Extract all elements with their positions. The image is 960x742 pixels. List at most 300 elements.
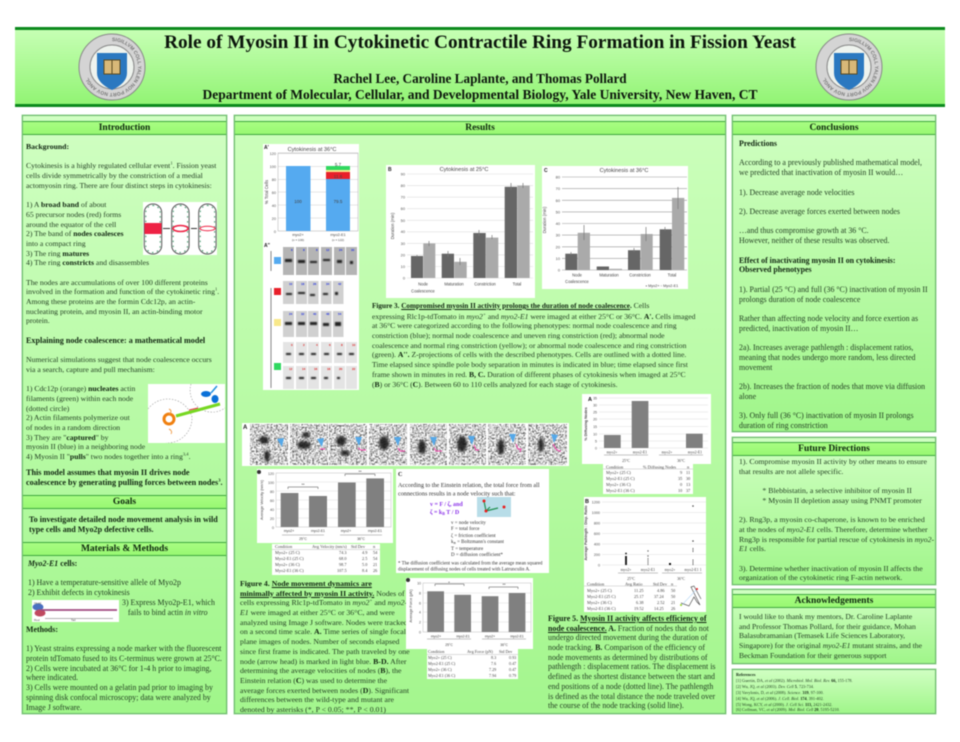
chart: A prime cytokinesis at 36C: 60 — [272, 191, 276, 195]
panel: C einstein relation: D = diffusion coefficient* — [451, 553, 503, 558]
chart: fig 5 B pathlength displacement: myo2+ — [621, 568, 631, 572]
text: myo2-E1 cells — [28, 559, 182, 598]
table: force: 7.6 — [491, 661, 496, 666]
text: future directions body: Rng3p is responsible for partial rescue of cytokinesis in myo2- — [739, 534, 934, 544]
text: introduction body: around the equator of the cell — [26, 220, 116, 228]
figure: A double prime micrographs: 10 — [352, 343, 356, 347]
table: diffusing nodes: 11 — [686, 470, 690, 475]
chart: B cytokinesis at 25C: 0 — [403, 276, 406, 280]
chart: B average velocity: myo2-E1 — [368, 529, 382, 533]
chart: B average velocity: 60 — [270, 499, 274, 503]
chart: B cytokinesis at 25C: Node — [418, 282, 429, 286]
panel: C einstein relation: * The diffusion coefficient was calculated from the average mean squared — [398, 562, 543, 566]
heading: goals: Goals — [113, 497, 136, 507]
text: conclusions body: 2). Decrease average forces exerted between nodes — [739, 207, 900, 216]
figure: A double prime micrographs: 6 — [291, 248, 293, 252]
figure: A double prime micrographs: 8 — [316, 248, 318, 252]
table: pathlength ratio: 6.38 — [636, 600, 644, 605]
panel: C einstein relation: displacement of diffusing nodes of cells treated with Latrunculin A. — [398, 568, 530, 572]
table: velocity: n — [373, 544, 376, 549]
table: pathlength ratio: Condition — [587, 582, 605, 586]
panel: C einstein relation: ζ = friction coefficient — [451, 533, 496, 539]
table: pathlength ratio: Myo2+ (36 C) — [587, 600, 612, 605]
chart: B average velocity: 40 — [270, 508, 274, 512]
chart: B cytokinesis at 25C: 70 — [401, 195, 406, 200]
text: introduction body: 1) A broad band of about — [26, 200, 106, 209]
table: pathlength ratio: 26 — [671, 606, 676, 611]
caption: figure 5: Figure 5. Myosin II activity affects efficiency of — [548, 614, 707, 623]
chart: D average force: 6 — [419, 602, 421, 606]
text: model assumption: coalescence by generating pulling forces between nodes3. — [26, 477, 223, 487]
chart: fig 5 B pathlength displacement: 400 — [594, 542, 600, 546]
text: conclusions body: Observed phenotypes — [739, 265, 812, 274]
chart: A prime cytokinesis at 36C: A' — [264, 145, 269, 151]
panel: results — [234, 115, 726, 714]
left column — [22, 115, 227, 714]
figure: myosin molecule: Tail — [71, 618, 76, 622]
caption: figure 5 — [547, 614, 716, 711]
text: myo2-E1 cells: 2) Exhibit defects in cytokinesis — [28, 588, 130, 597]
figure: A time series strip: A — [243, 425, 248, 431]
text: introduction body: cells divide symmetrically by the constriction of a medial — [26, 171, 203, 180]
figure: A double prime micrographs: 8 — [303, 248, 305, 252]
text: introduction body: Explaining node coalescence: a mathematical model — [26, 336, 205, 345]
chart: fig 5 B pathlength displacement: 36°C — [677, 577, 685, 581]
table: force: 0.79 — [509, 673, 516, 678]
authors: Rachel Lee, Caroline Laplante, and Thomas Pollard — [333, 71, 627, 86]
chart: B cytokinesis at 25C: Cytokinesis at 25°C — [440, 167, 488, 173]
caption: figure 5: is defined as the total distance the node traveled over — [548, 692, 715, 700]
chart: D average force: Average Force (pN) — [409, 589, 413, 623]
chart: D average force: myo2+ — [485, 634, 495, 638]
text: conclusions body: …and thus compromise growth at 36 °C. — [739, 226, 869, 235]
text: introduction body: 3) They are "captured" by — [26, 433, 108, 442]
chart: A prime cytokinesis at 36C: 120 — [270, 152, 276, 156]
figures — [242, 144, 712, 680]
chart: B average velocity — [257, 469, 393, 543]
text: introduction body: 4) The ring constricts and disassembles — [26, 258, 149, 267]
heading: future directions — [733, 442, 935, 456]
table: diffusing nodes: Myo2+ (36 C) — [606, 482, 631, 487]
chart: C cytokinesis at 36C: 10 — [556, 256, 561, 261]
chart: A prime cytokinesis at 36C: 100 — [294, 199, 302, 204]
chart: D average force: myo2-E1 — [510, 634, 524, 638]
figure: A double prime micrographs: 16 — [314, 367, 318, 371]
chart: D average force: 0 — [419, 630, 421, 634]
text: introduction body: The nodes are accumulations of over 100 different proteins — [26, 278, 208, 287]
figure: A double prime micrographs: 12 — [289, 367, 293, 371]
text: future directions body: 1). Compromise myosin II activity by other means to ensure — [739, 457, 927, 466]
table: pathlength ratio: Myo2-E1 (36 C) — [587, 606, 616, 611]
panel: C einstein relation: k — [451, 540, 454, 545]
figure: A double prime micrographs: 0 — [291, 343, 293, 347]
table: pathlength ratio: n — [671, 582, 674, 586]
text: conclusions body: we predicted that inactivation of myosin II would… — [739, 168, 903, 177]
caption: figure 3 — [372, 301, 696, 390]
heading: results — [235, 121, 725, 135]
table: velocity: Myo2+ (25 C) — [275, 550, 300, 555]
chart: B cytokinesis at 25C: 20 — [401, 252, 406, 257]
chart: B cytokinesis at 25C: Duration (min) — [390, 212, 395, 239]
panel: references — [732, 669, 936, 714]
text: methods: 1) Yeast strains expressing a node marker with the fluorescent — [26, 644, 221, 653]
caption: figure 4: denoted by asterisks (*, P < 0.05; **, P < 0.01) — [240, 705, 386, 714]
chart: C cytokinesis at 36C: 40 — [556, 221, 561, 226]
table: velocity: 68.0 — [339, 556, 347, 561]
text: conclusions body — [738, 139, 928, 431]
text: references: [5] Wong, KCY, et al (2000). J. Cell Sci. 113, 2421-2432. — [736, 702, 832, 707]
text: introduction body: into a compact ring — [26, 239, 86, 248]
table: velocity: 54 — [373, 550, 378, 555]
caption: figure 4: on a second time scale. A. Time series of single focal — [240, 627, 406, 636]
figure: A double prime micrographs: 26 — [313, 282, 317, 286]
panel: materials and methods — [22, 541, 226, 713]
table: velocity: Std Dev — [351, 544, 366, 549]
chart: B average velocity: 100 — [268, 481, 274, 485]
caption: figure 5: end positions of a node (dotted line). The pathlength — [548, 682, 713, 691]
text: references: References — [736, 672, 755, 677]
chart: B average velocity: myo2+ — [284, 529, 294, 533]
chart: B average velocity: myo2+ — [341, 529, 351, 533]
chart: A prime cytokinesis at 36C: 40 — [272, 204, 276, 208]
text: introduction body: (dotted circle) — [26, 404, 69, 413]
figure: A double prime micrographs: 20 — [339, 367, 343, 371]
chart: B cytokinesis at 25C — [386, 165, 535, 298]
text: methods — [26, 625, 222, 713]
table: diffusing nodes: 35 — [678, 476, 682, 481]
table: force: Avg Force (pN) — [467, 649, 493, 654]
text: future directions body: at the nodes of myo2-E1 cells. Therefore, determine whether — [739, 525, 928, 534]
chart: A prime cytokinesis at 36C: % Total Cells — [264, 180, 269, 204]
table: velocity: 74.3 — [339, 550, 347, 555]
figure: A double prime micrographs: 40 — [313, 312, 317, 316]
table: pathlength ratio: 50 — [671, 588, 675, 593]
chart: fig 5 A diffusing nodes: myo2-E1 — [633, 450, 647, 454]
caption: figure 4: plane images of nodes. Number of seconds elapsed — [240, 637, 399, 646]
table: velocity: 107.5 — [337, 568, 347, 573]
text: methods: spinning disk confocal microscopy; data were analyzed by — [26, 693, 211, 702]
text: future directions body: E1 cells. — [739, 544, 766, 553]
panel: C einstein relation: ζ = k — [430, 510, 442, 516]
table: force — [427, 649, 518, 679]
chart: C cytokinesis at 36C: Node — [572, 272, 583, 278]
text: methods: Methods: — [26, 625, 58, 634]
text: future directions body: * Blebbistatin, a selective inhibitor of myosin II — [762, 486, 912, 495]
chart: B cytokinesis at 25C: 90 — [401, 172, 406, 176]
text: introduction body: myosin II (blue) in a neighboring node — [26, 442, 145, 451]
figure: A time series strip — [242, 423, 569, 466]
chart: C cytokinesis at 36C: Duration (min) — [542, 206, 547, 233]
text: future directions body — [738, 457, 934, 582]
text: methods: where indicated. — [26, 673, 78, 682]
chart: fig 5 A diffusing nodes: 0 — [595, 446, 597, 450]
chart: A prime cytokinesis at 36C: 20 — [272, 217, 276, 221]
chart: fig 5 A diffusing nodes: 30 — [593, 404, 597, 408]
figure: myosin molecule: Rod — [34, 618, 40, 622]
text: acknowledgements body: and Professor Thomas Pollard, for their guidance, Mohan — [739, 622, 916, 631]
chart: A prime cytokinesis at 36C: 5.7 — [335, 162, 342, 167]
chart: C cytokinesis at 36C: 30 — [556, 233, 561, 238]
chart: C cytokinesis at 36C: 0 — [558, 268, 561, 272]
chart: C cytokinesis at 36C: 60 — [556, 198, 561, 203]
text: conclusions body: Effect of inactivating myosin II on cytokinesis: — [739, 256, 896, 265]
chart: fig 5 A diffusing nodes: 35 — [593, 396, 597, 400]
table: pathlength ratio: 37.24 — [654, 594, 665, 599]
text: acknowledgements body: I would like to thank my mentors, Dr. Caroline Laplante — [739, 612, 912, 621]
text: myo2-E1 third point: 3) Express Myo2p-E1, which — [122, 598, 215, 607]
caption: figure 5: node tracking. B. Comparison of the efficiency of — [548, 643, 705, 652]
caption: figure 5: defined as the shortest distance between the start and — [548, 672, 715, 681]
text: introduction body: Cytokinesis is a highly regulated cellular event1. Fission yeast — [26, 161, 216, 170]
chart: D average force: 25°C — [445, 643, 453, 647]
text: acknowledgements body: Balasubramanian (Temasek Life Sciences Laboratory, — [739, 631, 905, 640]
chart: D average force: 36°C — [500, 643, 508, 647]
table: pathlength ratio: 11.25 — [634, 588, 644, 593]
caption: figure 5: undergo directed movement during the duration of — [548, 633, 707, 642]
figure: A double prime micrographs: 18 — [327, 367, 331, 371]
chart: fig 5 B pathlength displacement: 600 — [594, 532, 600, 536]
caption: figure 4: average forces exerted between nodes (D). Significant — [240, 686, 409, 695]
caption: figure 3: at 36°C were categorized according to the following phenotypes: normal node coalescence and ring — [372, 321, 677, 330]
chart: fig 5 B pathlength displacement: myo2-E1 1 — [685, 568, 702, 572]
heading: acknowledgements — [733, 594, 935, 608]
caption: figure 4: since first frame is indicated. The path traveled by one — [240, 647, 410, 656]
chart: fig 5 A diffusing nodes: 5 — [595, 440, 597, 444]
panel: goals — [22, 494, 226, 535]
text: introduction body: nucleating protein, and myosin II, an actin-binding motor — [26, 307, 203, 316]
panel: acknowledgements — [732, 589, 936, 664]
table: velocity: 98.7 — [339, 562, 347, 567]
chart: C cytokinesis at 36C: Constriction — [629, 272, 652, 278]
table: force: Myo2+ (25 C) — [428, 655, 452, 660]
table: velocity: 8.4 — [362, 568, 368, 573]
figure: A double prime micrographs: 48 — [326, 312, 330, 316]
chart: B average velocity: 0 — [272, 526, 274, 530]
text: introduction body: 4) Myosin II "pulls" two nodes together into a ring3,4. — [26, 451, 190, 461]
caption: figure 4: Figure 4. Node movement dynamics are — [240, 579, 372, 588]
panel: C einstein relation: T = temperature — [451, 547, 484, 552]
text: references — [736, 672, 853, 712]
chart: D average force: myo2-E1 — [456, 634, 470, 638]
chart: B cytokinesis at 25C: 10 — [401, 264, 406, 269]
table: diffusing nodes: Myo2-E1 (25 C) — [606, 476, 635, 481]
text: references: [6] Coffman, VC, et al (2009). Mol. Biol. Cell 20, 5195-5210. — [736, 707, 840, 712]
chart: fig 5 B pathlength displacement: myo2+ — [665, 568, 675, 572]
chart: C cytokinesis at 36C: Coalescence — [565, 279, 590, 284]
table: diffusing nodes: Condition — [606, 464, 624, 470]
panel: C einstein relation: = Boltzmann's constant — [456, 540, 504, 545]
chart: fig 5 B pathlength displacement: 200 — [594, 553, 600, 557]
table: force: 0.47 — [509, 667, 516, 672]
chart: B cytokinesis at 25C: Constriction — [474, 282, 497, 286]
panel: introduction — [22, 120, 226, 488]
chart: A prime cytokinesis at 36C: 80 — [272, 178, 276, 182]
text: conclusions body: 1). Decrease average node velocities — [739, 188, 854, 197]
table: pathlength ratio: 25.17 — [634, 594, 645, 599]
chart: fig 5 A diffusing nodes: 25°C — [622, 459, 630, 463]
heading: introduction: Introduction — [99, 123, 150, 133]
table: velocity: Avg Velocity (nm/s) — [312, 544, 347, 549]
chart: B average velocity: Average Velocity (nm/s) — [260, 479, 264, 520]
caption: figure 3: constriction (blue); normal node coalescence and uneven ring constriction (red); abnormal node — [372, 331, 665, 340]
table: diffusing nodes: 13 — [686, 482, 690, 487]
table: velocity: 54 — [373, 556, 378, 561]
panel: C einstein relation: F = total force — [451, 527, 480, 532]
text: introduction body: 2) The band of nodes coalesces — [26, 229, 123, 238]
figure: A double prime micrographs: 12 — [326, 248, 330, 252]
chart: B average velocity: ** — [301, 482, 305, 487]
chart: C cytokinesis at 36C: C — [544, 168, 548, 174]
table: diffusing nodes: Myo2+ (25 C) — [606, 470, 631, 475]
text: introduction body: involved in the formation and function of the cytokinetic ring1. — [26, 287, 219, 296]
panel: C einstein relation: T / D — [445, 510, 460, 516]
chart: B cytokinesis at 25C: 30 — [401, 241, 406, 246]
panel: C einstein relation: According to the Einstein relation, the total force from all — [398, 482, 540, 489]
figure: A double prime micrographs: 24 — [339, 248, 343, 252]
caption: figure 4: cells expressing Rlc1p-tdTomato in myo2+ and myo2- — [240, 598, 407, 607]
chart: C cytokinesis at 36C: ▪ Myo2+ ▫ Myo2-E1 — [646, 284, 678, 288]
chart: fig 5 B pathlength displacement: B — [585, 499, 589, 505]
caption: figure 5: pathlength : displacement ratios. The displacement is — [548, 662, 716, 671]
figure: A double prime micrographs: A'' — [264, 243, 270, 249]
text: methods: Image J software. — [26, 702, 82, 712]
panel: C einstein relation: v = node velocity — [451, 521, 486, 526]
chart: D average force: 2 — [419, 620, 421, 624]
panel: C einstein relation: C — [398, 472, 402, 478]
figure: A double prime micrographs: 4 — [316, 343, 318, 347]
table: velocity: 21 — [373, 562, 377, 567]
text: methods: 3) Cells were mounted on a gelatin pad prior to imaging by — [26, 683, 213, 692]
chart: fig 5 B pathlength displacement: 1000 — [592, 511, 600, 515]
table: pathlength ratio: Myo2+ (25 C) — [587, 588, 612, 593]
panel: conclusions — [732, 115, 936, 432]
text: methods: 2) Cells were incubated at 36°C for 1-4 h prior to imaging, — [26, 664, 211, 673]
text: conclusions body: duration of ring constriction — [739, 421, 828, 430]
table: pathlength ratio: 14.25 — [654, 606, 664, 611]
text: goals: type cells and Myo2p defective cells. — [29, 525, 154, 534]
chart: B cytokinesis at 25C: B — [388, 167, 392, 173]
table: diffusing nodes: 0 — [680, 482, 682, 487]
panel: future directions — [732, 437, 936, 585]
caption: figure 3: Time elapsed since spindle pole body separation in minutes is indicated in blue; time elapsed since first — [372, 360, 688, 369]
chart: C cytokinesis at 36C: Total — [668, 272, 676, 278]
caption: figure 5: node movements as determined by distributions of — [548, 653, 708, 662]
chart: C cytokinesis at 36C: 50 — [556, 209, 561, 214]
text: conclusions body: However, neither of these results was observed. — [739, 236, 889, 245]
caption: figure 4 — [239, 579, 410, 714]
chart: fig 5 A diffusing nodes: 36°C — [677, 459, 685, 463]
heading: introduction — [23, 121, 226, 135]
heading: results: Results — [465, 123, 495, 133]
text: introduction body: filaments (green) within each node — [26, 394, 133, 403]
table: velocity: Myo2-E1 (25 C) — [275, 556, 304, 561]
text: future directions body: that results are not allele specific. — [739, 467, 843, 476]
chart: A prime cytokinesis at 36C: (n = 122) — [332, 238, 344, 242]
icon: Yale seal left: SIGILLVM COLL YALEN NOV PORT NOV ANGL — [86, 37, 142, 97]
panel: C einstein relation: connections results in a node velocity such that: — [398, 492, 516, 498]
text: acknowledgements body — [738, 612, 922, 660]
figure: A double prime micrographs: 34 — [326, 282, 330, 286]
caption: figure 3: expressing Rlc1p-tdTomato in myo2+ and myo2-E1 were imaged at either 25°C or 36°C. A'. Cells imaged — [372, 311, 695, 321]
chart: B average velocity: ** — [358, 469, 362, 474]
text: references: [1] Guertin, DA, et al (2002). Microbiol. Mol. Biol. Rev. 66, 155-178. — [736, 678, 853, 683]
text: conclusions body: According to a previously published mathematical model, — [739, 158, 922, 167]
text: introduction body: 65 precursor nodes (red) forms — [26, 210, 121, 219]
chart: B cytokinesis at 25C: 40 — [401, 229, 406, 234]
chart: fig 5 B pathlength displacement: 25°C — [627, 577, 635, 581]
table: pathlength ratio: 19.52 — [634, 606, 644, 611]
table: pathlength ratio: Myo2-E1 (25 C) — [587, 594, 616, 599]
text: introduction body: 3) The ring matures — [26, 249, 89, 258]
text: myo2-E1 third point: fails to bind actin in vitro — [128, 608, 208, 617]
table: diffusing nodes: Myo2-E1 (36 C) — [606, 488, 635, 493]
caption: figure 3: (B) or 36°C (C). Between 60 to 110 cells analyzed for each stage of cytokinesis. — [372, 380, 618, 388]
chart: A prime cytokinesis at 36C — [263, 144, 359, 390]
caption: figure 4: differences between the wild-type and mutant are — [240, 695, 394, 704]
text: myo2-E1 cells: Myo2-E1 cells: — [28, 559, 77, 568]
table: velocity: Myo2-E1 (36 C) — [275, 568, 304, 573]
figure: A double prime micrographs: 42 — [338, 282, 342, 286]
chart: C cytokinesis at 36C: Cytokinesis at 36°C — [600, 168, 648, 174]
text: conclusions body: movement — [739, 363, 772, 372]
chart: fig 5 A diffusing nodes: 25 — [593, 410, 597, 414]
chart: fig 5 B pathlength displacement: 0 — [598, 564, 600, 568]
chart: A prime cytokinesis at 36C: 11.6 — [334, 174, 343, 179]
text: conclusions body: Predictions — [739, 139, 777, 148]
caption: figure 3: Figure 3. Compromised myosin II activity prolongs the duration of node coalescence. Cells — [372, 301, 649, 310]
table: velocity: Myo2+ (36 C) — [275, 562, 300, 567]
table: velocity — [272, 544, 380, 575]
chart: C cytokinesis at 36C — [542, 166, 688, 289]
table: diffusing nodes: 10 — [678, 488, 682, 493]
table: force: 0.47 — [509, 661, 516, 666]
text: conclusions body: 2a). Increases average pathlength : displacement ratios, — [739, 343, 913, 352]
chart: B average velocity: myo2-E1 — [311, 529, 325, 533]
chart: A prime cytokinesis at 36C: myo2-E1 — [330, 233, 346, 237]
caption: figure 4: minimally affected by myosin II activity. Nodes of — [240, 589, 405, 598]
chart: C cytokinesis at 36C: Maturation — [599, 272, 619, 278]
panel: C einstein relation — [396, 469, 549, 573]
text: references: [3] Vavylonis, D, et al (2008). Science. 319, 97-100. — [736, 690, 824, 695]
chart: A prime cytokinesis at 36C: 0 — [274, 230, 276, 234]
figure: A double prime micrographs: 8 — [341, 343, 343, 347]
table: force: Myo2-E1 (36 C) — [428, 673, 456, 678]
panel: C einstein relation: B — [454, 541, 456, 545]
text: introduction body: 2) Actin filaments polymerize out — [26, 413, 130, 422]
text: future directions body: * Myosin II depletion assay using PNMT promoter — [762, 496, 922, 505]
table: pathlength ratio: Avg Ratio — [625, 582, 642, 586]
chart: fig 5 A diffusing nodes: myo2-E1 — [688, 450, 702, 454]
caption: figure 4: analyzed using Image J software. Nodes were tracked — [240, 618, 408, 627]
text: introduction body — [26, 142, 220, 462]
text: introduction body: Among these proteins are the formin Cdc12p, an actin- — [26, 297, 195, 306]
text: introduction body: protein. — [26, 316, 50, 325]
text: myo2-E1 third point — [122, 598, 216, 617]
chart: fig 5 B pathlength displacement: Average Pathlngth : Disp. Ratio — [584, 505, 588, 560]
text: introduction body: via a search, capture and pull mechanism: — [26, 365, 155, 374]
figure: A double prime micrographs: 24 — [289, 312, 293, 316]
chart: B average velocity: 20 — [270, 517, 274, 521]
chart: D average force: 10 — [417, 582, 421, 586]
heading: conclusions: Conclusions — [809, 123, 859, 133]
chart: B average velocity: 80 — [270, 490, 274, 494]
chart: fig 5 B pathlength displacement: 800 — [594, 522, 600, 526]
caption: figure 3: (green). A''. Z-projections of cells with the described phenotypes. Cells are outlined with a dotted line. — [372, 350, 686, 359]
table: diffusing nodes: n — [687, 464, 690, 470]
figure: A double prime micrographs: 14 — [302, 367, 306, 371]
table: velocity: 2.5 — [362, 556, 367, 561]
chart: fig 5 B pathlength displacement — [584, 497, 706, 582]
